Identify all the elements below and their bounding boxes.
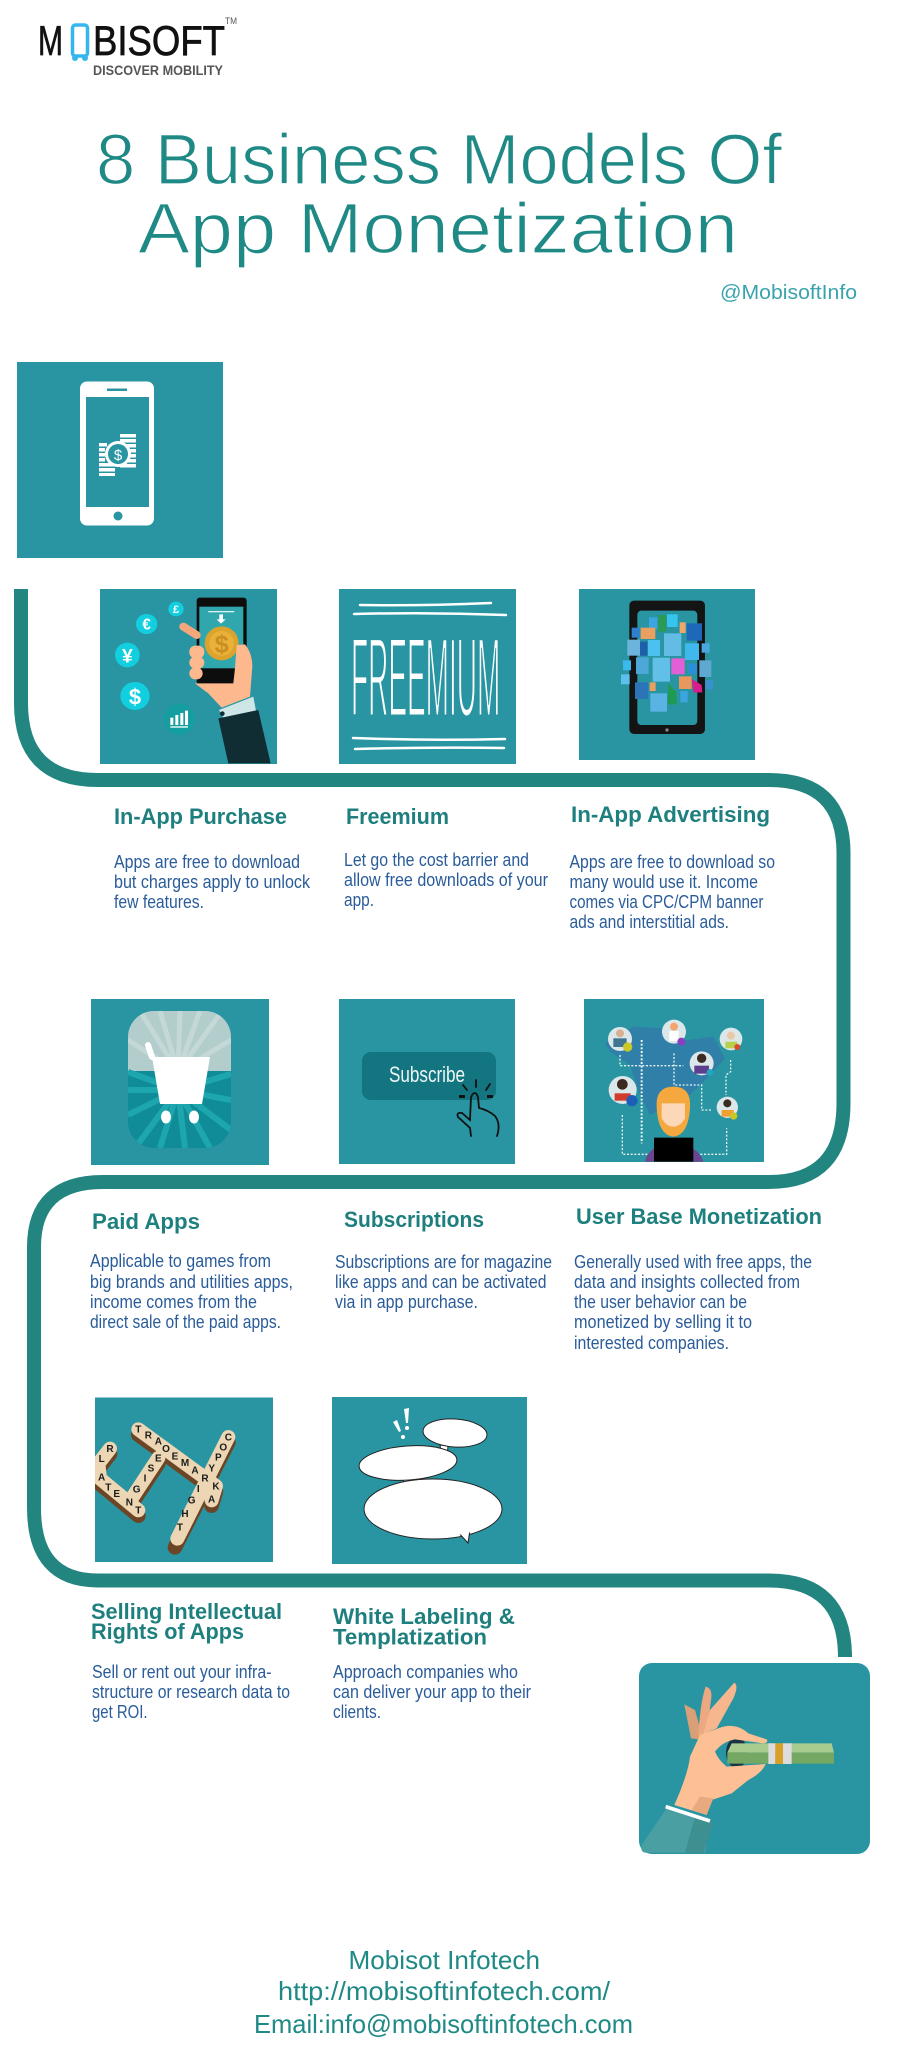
- heading: Paid Apps: [92, 1209, 200, 1234]
- icon: coin stacks: $: [114, 447, 123, 464]
- image: letter dice crossword: C: [225, 1432, 232, 1443]
- heading: Subscriptions: [344, 1207, 484, 1232]
- body text: interested companies.: [574, 1333, 729, 1353]
- image: letter dice crossword: P: [215, 1452, 222, 1463]
- body text: Sell or rent out your infra-: [92, 1662, 272, 1682]
- image: letter dice crossword: K: [212, 1481, 220, 1492]
- image: letter dice crossword: H: [181, 1509, 189, 1520]
- footer contact: [254, 1945, 633, 2039]
- image: letter dice crossword: R: [201, 1473, 209, 1484]
- body text: but charges apply to unlock: [114, 872, 311, 892]
- body text: [90, 1251, 293, 1332]
- logo: Mobisoft: [38, 16, 237, 78]
- image: letter dice crossword: T: [135, 1425, 141, 1436]
- panel: in-app purchase: [100, 589, 311, 912]
- body text: comes via CPC/CPM banner: [570, 892, 764, 912]
- image: letter dice crossword: A: [208, 1495, 215, 1506]
- body text: income comes from the: [90, 1292, 257, 1312]
- heading: Templatization: [333, 1624, 487, 1650]
- image: letter dice crossword: A: [155, 1437, 162, 1448]
- title: [96, 121, 782, 269]
- body text: direct sale of the paid apps.: [90, 1312, 281, 1332]
- panel: paid apps: [90, 999, 293, 1332]
- body text: clients.: [333, 1702, 381, 1722]
- body text: [333, 1662, 531, 1722]
- image: letter dice crossword: [95, 1398, 273, 1562]
- body text: get ROI.: [92, 1702, 148, 1722]
- image: subscribe button with pointer: Subscribe: [389, 1062, 465, 1087]
- heading: In-App Purchase: [114, 804, 287, 829]
- panel: freemium: [339, 589, 548, 910]
- heading: [91, 1599, 282, 1644]
- body text: like apps and can be activated: [335, 1272, 546, 1292]
- body text: structure or research data to: [92, 1682, 290, 1702]
- road path connecting the models: [21, 589, 845, 1657]
- image: hand holding phone with currencies: ¥: [122, 646, 133, 667]
- logo: Mobisoft: BISOFT: [93, 17, 225, 64]
- panel: white labeling: [332, 1397, 531, 1722]
- panel: selling intellectual rights: [91, 1398, 290, 1722]
- body text: [574, 1252, 812, 1353]
- body text: big brands and utilities apps,: [90, 1272, 293, 1292]
- body text: [570, 852, 775, 932]
- body text: [114, 852, 311, 912]
- image: network of users around a person: [584, 999, 764, 1162]
- body text: [344, 850, 548, 910]
- heading: Freemium: [346, 804, 449, 829]
- title: App Monetization: [138, 190, 738, 269]
- body text: Let go the cost barrier and: [344, 850, 529, 870]
- image: letter dice crossword: O: [162, 1444, 170, 1455]
- image: letter dice crossword: T: [177, 1522, 183, 1533]
- image: letter dice crossword: L: [99, 1454, 105, 1465]
- heading: In-App Advertising: [571, 802, 770, 827]
- image: letter dice crossword: N: [126, 1497, 133, 1508]
- body text: Subscriptions are for magazine: [335, 1252, 552, 1272]
- image: shopping cart app icon: [91, 999, 269, 1165]
- image: letter dice crossword: G: [188, 1496, 196, 1507]
- icon: logo phone: [72, 25, 88, 61]
- image: letter dice crossword: E: [113, 1489, 120, 1500]
- social handle: @MobisoftInfo: [720, 282, 857, 304]
- icon: phone: [80, 382, 154, 526]
- image: letter dice crossword: G: [133, 1485, 141, 1496]
- body text: many would use it. Income: [570, 872, 758, 892]
- panel: start phone with coins: [17, 362, 223, 558]
- image: hand holding phone with currencies: [100, 589, 277, 764]
- image: letter dice crossword: S: [148, 1463, 155, 1474]
- footer contact: Email:info@mobisoftinfotech.com: [254, 2009, 633, 2039]
- body text: [92, 1662, 290, 1722]
- image: letter dice crossword: T: [135, 1506, 141, 1517]
- image: hand holding phone with currencies: $: [215, 630, 229, 658]
- image: letter dice crossword: T: [105, 1482, 111, 1493]
- heading: User Base Monetization: [576, 1204, 822, 1229]
- body text: Apps are free to download so: [570, 852, 775, 872]
- image: freemium lettering: [339, 589, 516, 764]
- body text: ads and interstitial ads.: [570, 912, 729, 932]
- image: subscribe button with pointer: [339, 999, 515, 1164]
- footer contact: Mobisot Infotech: [348, 1945, 540, 1975]
- heading: [333, 1604, 515, 1650]
- image: letter dice crossword: Y: [208, 1463, 215, 1474]
- image: letter dice crossword: A: [191, 1466, 199, 1477]
- body text: can deliver your app to their: [333, 1682, 531, 1702]
- image: letter dice crossword: E: [172, 1451, 179, 1462]
- image: tablet with app icons: [579, 589, 755, 760]
- panel: user base monetization: [574, 999, 822, 1353]
- panel: subscriptions: [335, 999, 552, 1312]
- image: hand holding money: [641, 1683, 834, 1853]
- heading: Rights of Apps: [91, 1619, 244, 1644]
- body text: Apps are free to download: [114, 852, 300, 872]
- image: letter dice crossword: O: [219, 1442, 227, 1453]
- title: 8 Business Models Of: [96, 121, 782, 200]
- body text: few features.: [114, 892, 204, 912]
- image: letter dice crossword: R: [145, 1431, 152, 1442]
- body text: Applicable to games from: [90, 1251, 271, 1271]
- image: letter dice crossword: I: [197, 1484, 200, 1495]
- logo: Mobisoft: DISCOVER MOBILITY: [93, 63, 223, 78]
- heading: White Labeling &: [333, 1604, 515, 1629]
- icon: coin stacks: [99, 434, 136, 476]
- panel: in-app advertising: [570, 589, 775, 932]
- body text: app.: [344, 890, 374, 910]
- image: letter dice crossword: M: [181, 1458, 189, 1469]
- body text: Approach companies who: [333, 1662, 518, 1682]
- image: letter dice crossword: E: [155, 1453, 162, 1464]
- body text: via in app purchase.: [335, 1292, 478, 1312]
- image: letter dice crossword: A: [98, 1472, 105, 1483]
- logo: Mobisoft: M: [38, 17, 63, 64]
- image: hand holding phone with currencies: £: [173, 604, 180, 616]
- image: hand holding phone with currencies: $: [129, 684, 141, 709]
- footer contact: http://mobisoftinfotech.com/: [278, 1976, 611, 2006]
- panel: end hand holding cash: [639, 1663, 870, 1854]
- image: speech bubbles: [332, 1397, 527, 1564]
- image: freemium lettering: FREEMIUM: [351, 616, 500, 741]
- heading: Selling Intellectual: [91, 1599, 282, 1624]
- body text: data and insights collected from: [574, 1272, 800, 1292]
- body text: Generally used with free apps, the: [574, 1252, 812, 1272]
- body text: allow free downloads of your: [344, 870, 548, 890]
- image: letter dice crossword: R: [106, 1444, 114, 1455]
- logo: Mobisoft: TM: [225, 16, 237, 26]
- body text: the user behavior can be: [574, 1292, 747, 1312]
- image: hand holding phone with currencies: €: [142, 616, 151, 633]
- body text: monetized by selling it to: [574, 1312, 752, 1332]
- body text: [335, 1252, 552, 1312]
- image: letter dice crossword: I: [144, 1473, 147, 1484]
